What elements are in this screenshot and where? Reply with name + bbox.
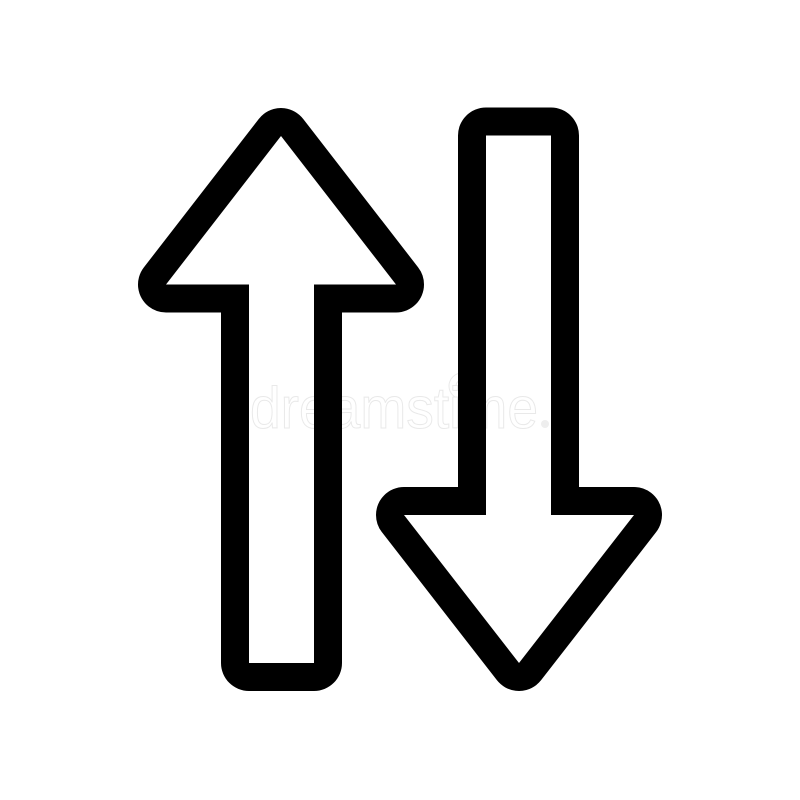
arrow pointing up: [166, 136, 396, 663]
arrow pointing down: [404, 136, 634, 663]
icon: up and down arrows: [138, 108, 662, 691]
watermark: dreamstime: [250, 376, 538, 441]
arrows: [166, 136, 634, 663]
